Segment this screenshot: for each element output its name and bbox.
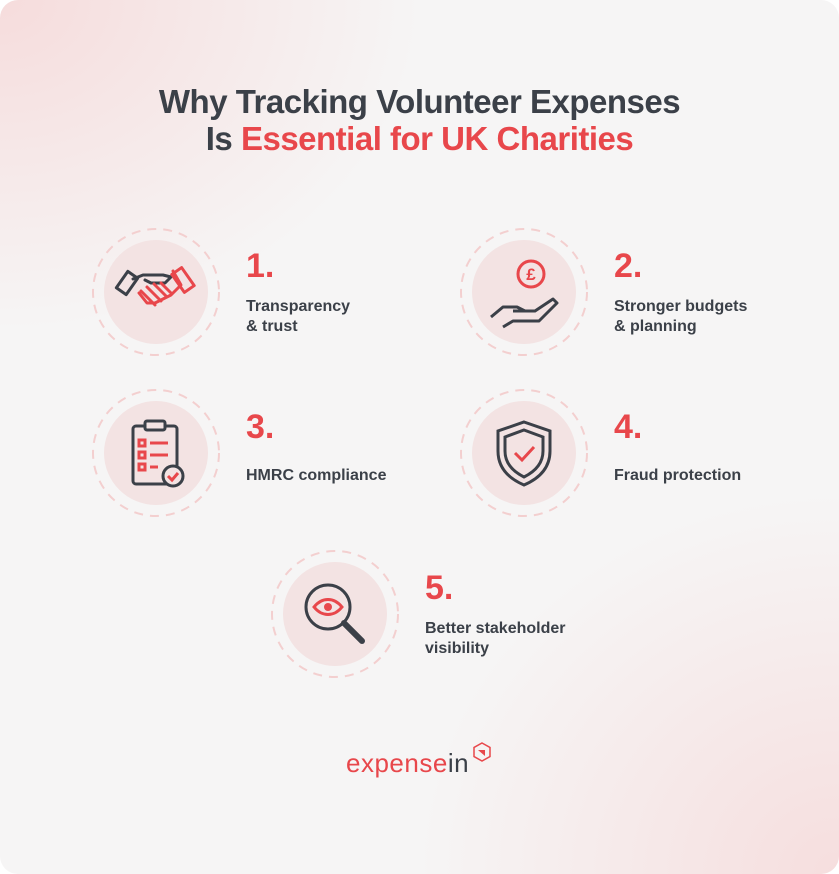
title — [158, 83, 680, 157]
number 2: 2. — [614, 247, 642, 285]
label: & trust — [246, 318, 298, 335]
label: & planning — [614, 318, 697, 335]
label: Stronger budgets — [614, 298, 747, 315]
label — [246, 298, 350, 335]
item 1: transparency — [92, 228, 350, 356]
label — [425, 620, 566, 657]
label: Fraud protection — [614, 467, 741, 484]
number 1: 1. — [246, 247, 274, 285]
label: visibility — [425, 640, 489, 657]
item 5: visibility — [271, 550, 566, 678]
icon: shield — [460, 389, 588, 517]
number 5: 5. — [425, 569, 453, 607]
icon: hand with pound coin — [460, 228, 588, 356]
logo: expensein — [346, 748, 469, 778]
icon: hand with pound coin: £ — [526, 265, 536, 284]
item 2: budgets — [460, 228, 747, 356]
number 4: 4. — [614, 408, 642, 446]
label — [614, 298, 747, 335]
label: HMRC compliance — [246, 467, 386, 484]
number 3: 3. — [246, 408, 274, 446]
icon: magnifier with eye — [271, 550, 399, 678]
icon: clipboard — [92, 389, 220, 517]
label: Better stakeholder — [425, 620, 566, 637]
label: Transparency — [246, 298, 350, 315]
item 3: HMRC — [92, 389, 386, 517]
title: Why Tracking Volunteer Expenses — [159, 83, 680, 120]
title: Is Essential for UK Charities — [206, 120, 633, 157]
icon: handshake — [92, 228, 220, 356]
item 4: fraud — [460, 389, 741, 517]
